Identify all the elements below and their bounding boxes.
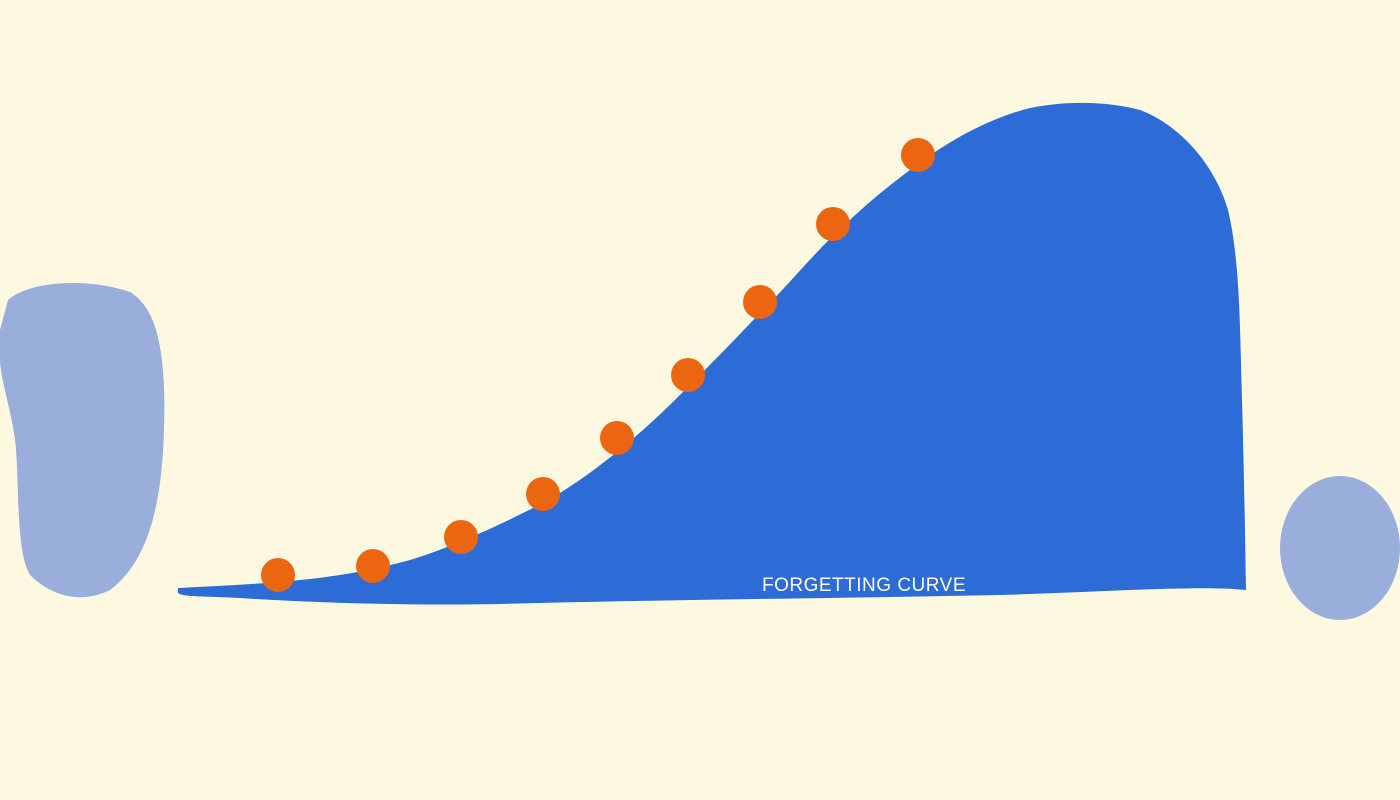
right decorative blob (1280, 476, 1400, 620)
data points (261, 138, 935, 592)
left decorative blob (0, 283, 164, 597)
curve label: FORGETTING CURVE (762, 575, 966, 596)
